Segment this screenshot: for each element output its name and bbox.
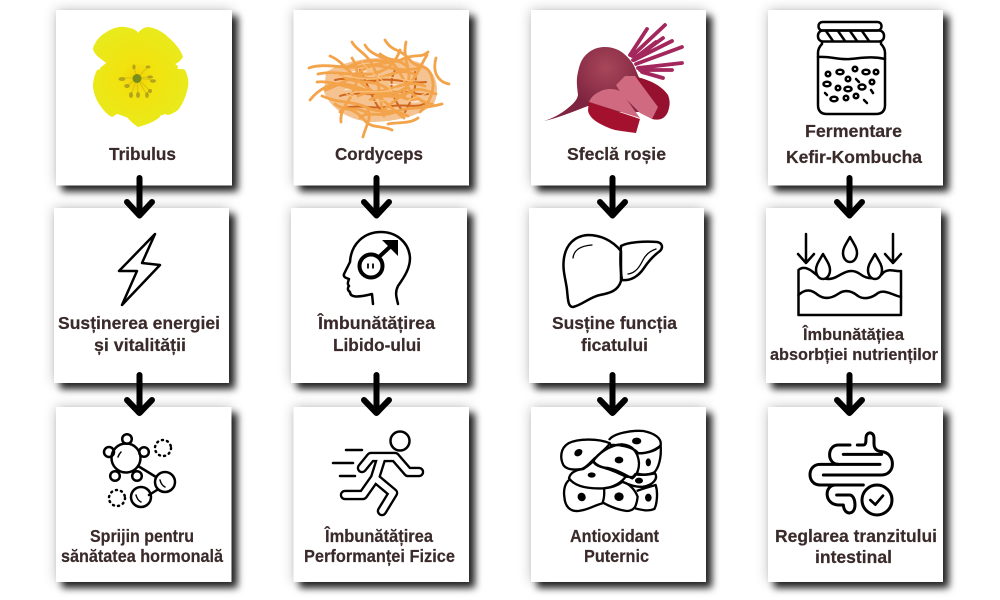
label: sănătatea hormonală: sănătatea hormonală	[61, 546, 223, 566]
label: Libido-ului: Libido-ului	[333, 335, 421, 355]
label: Cordyceps: Cordyceps	[335, 144, 423, 164]
label: ficatului: ficatului	[581, 335, 648, 355]
label: Îmbunătățirea: Îmbunătățirea	[317, 312, 435, 333]
label: intestinal: intestinal	[815, 547, 892, 567]
card: Susținerea energiei	[54, 208, 229, 383]
label: Susținerea energiei: Susținerea energiei	[58, 313, 220, 333]
arrow: energy to hormonal health	[127, 375, 152, 413]
arrow: absorption to intestinal transit	[837, 375, 862, 413]
label: Reglarea tranzitului: Reglarea tranzitului	[775, 526, 937, 546]
label: Puternic: Puternic	[584, 546, 649, 566]
icon: head with male symbol	[344, 232, 410, 304]
card: Fermentare Kefir-Kombucha	[768, 10, 943, 186]
icon: yellow tribulus flower	[93, 27, 188, 127]
label: Kefir-Kombucha: Kefir-Kombucha	[786, 147, 922, 167]
icon: orange cordyceps strands	[309, 40, 449, 137]
label: Îmbunătățirea: Îmbunătățirea	[324, 525, 433, 546]
arrow: fermentation to absorption	[837, 178, 862, 216]
icon: lightning bolt	[119, 234, 160, 305]
label: absorbției nutrienților: absorbției nutrienților	[770, 346, 939, 364]
label: Susține funcția: Susține funcția	[552, 313, 677, 333]
icon: liver	[563, 235, 662, 307]
arrows: second row to third row	[127, 375, 862, 413]
icon: cells	[561, 431, 661, 511]
card: Tribulus	[56, 10, 232, 186]
label: Tribulus: Tribulus	[109, 144, 176, 164]
arrow: beetroot to liver	[600, 178, 625, 216]
card: Reglarea tranzitului intestinal	[768, 407, 943, 582]
arrow: liver to antioxidant	[600, 375, 625, 413]
arrow: Tribulus to energy	[127, 178, 152, 216]
card: Sfeclă roșie	[531, 10, 706, 186]
icon: running figure	[333, 432, 419, 511]
card: Îmbunătățiea absorbției nutrienților	[766, 208, 941, 383]
card: Îmbunătățirea Libido-ului	[291, 208, 467, 383]
card: Susține funcția ficatului	[529, 208, 704, 383]
label: Fermentare: Fermentare	[805, 121, 902, 141]
icon: beetroot with slices	[544, 25, 682, 133]
label: Performanței Fizice: Performanței Fizice	[304, 546, 455, 566]
label: Sprijin pentru: Sprijin pentru	[90, 526, 194, 546]
label: Sfeclă roșie: Sfeclă roșie	[567, 144, 666, 164]
card: Sprijin pentru sănătatea hormonală	[56, 407, 232, 582]
arrow: Cordyceps to libido	[364, 178, 389, 216]
label: Îmbunătățiea: Îmbunătățiea	[802, 325, 905, 344]
icon: molecules	[104, 434, 175, 507]
icon: water absorption	[798, 234, 901, 315]
arrows: first row to second row	[127, 178, 862, 216]
card: Îmbunătățirea Performanței Fizice	[294, 407, 469, 582]
icon: intestines with check mark	[810, 433, 892, 515]
icon: fermentation jar	[818, 22, 885, 114]
label: și vitalității: și vitalității	[94, 335, 186, 355]
label: Antioxidant: Antioxidant	[570, 526, 659, 546]
arrow: libido to performance	[364, 375, 389, 413]
card: Cordyceps	[294, 10, 469, 186]
card: Antioxidant Puternic	[531, 407, 706, 582]
